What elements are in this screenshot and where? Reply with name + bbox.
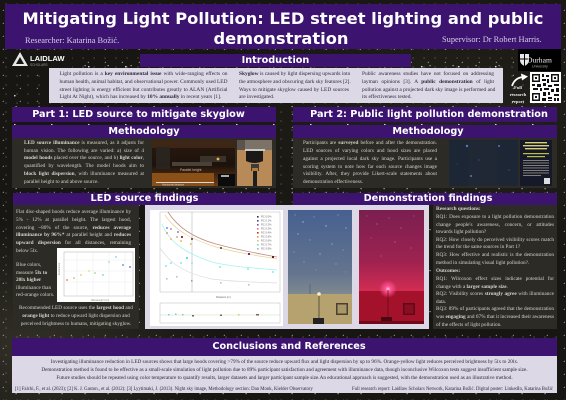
text: research questions: the trend for the same sources in Part 1? <box>436 244 520 250</box>
panel: charts and photos <box>145 205 429 329</box>
photo: red lamp under projected sky <box>359 210 424 324</box>
text: conclusions: Future studies should be repeated using color temperature to quantify results, larger datasets and larger participant sample size.An educational approach is suggested, with the demonstration used as an illustrative method. <box>56 375 513 381</box>
photo: measurement setup in dark room: Parallel height <box>180 168 202 172</box>
text: hood results: below 5lx. <box>16 248 38 254</box>
text: recommendation: orange light to reduce upward light dispersion and <box>22 313 130 319</box>
text: conclusions: Demonstration method is found to be effective as a small-scale simulation of light pollution due to 89% participant satisfaction and agreement with illuminance data, though inconclusive Wilcoxon tests suggest insufficient sample size. <box>41 367 528 373</box>
text: skyglow: are investigated. <box>239 94 274 100</box>
text: hood results: covering ~80% of the source, reduces average <box>16 224 131 230</box>
label: full research report: Full <box>514 85 522 90</box>
text: recommendation: perceived brightness to humans, mitigating skyglow. <box>21 320 131 326</box>
label: full research report: research <box>510 92 526 97</box>
chart: illuminance by wavelength: Illuminance <box>58 262 61 275</box>
chart: illuminance by wavelength <box>57 248 135 302</box>
logo: Durham University: University <box>532 64 548 68</box>
text: skyglow: the atmosphere and obscuring dark sky features [2]. <box>239 79 351 85</box>
text: methodology description: block light dispersion, with illuminance measured at <box>24 171 144 177</box>
panel: Part 1 methodology <box>12 138 276 188</box>
title <box>23 8 543 48</box>
title: Mitigating Light Pollution: LED street lighting and public <box>23 8 543 28</box>
supervisor name: Supervisor: Dr Robert Harris. <box>442 35 542 44</box>
text: research questions: towards light pollution? <box>436 229 486 235</box>
text: methodology description: parallel height to and above source. <box>24 179 99 185</box>
chart: illuminance against distance: RC 0.4% <box>261 231 272 235</box>
logo: Durham University: Durham <box>527 56 552 64</box>
text: research questions: RQ2: How closely do perceived visibility scores match <box>436 236 554 242</box>
text: skyglow: Skyglow is caused by light dispersing upwards into <box>239 71 350 77</box>
text: demonstration method: Participants are surveyed before and after the demonstration. <box>303 140 437 146</box>
text: light pollution context: Light At Night), which has increased by 10% annually in recent years [1]. <box>60 94 221 100</box>
text: public awareness: pollution against a projected dark sky image is performed and <box>362 86 495 92</box>
text: methodology description: human vision. The following are varied: a) size of 4 <box>24 148 144 154</box>
text: research questions: Research questions: <box>436 206 481 212</box>
text: recommendation: Recommended LED source uses the largest hood and <box>19 305 133 311</box>
heading: Conclusions and References <box>12 338 557 356</box>
text: public awareness: its effectiveness tested. <box>362 94 412 100</box>
text: public awareness: layman opinions [3]. A public demonstration of light <box>362 79 494 85</box>
text: hood results: Flat disc-shaped hoods reduce average illuminance by <box>16 209 131 215</box>
heading: Conclusions and References: Conclusions and References <box>212 341 366 352</box>
heading: Part 2 <box>293 107 557 122</box>
heading: Part 1: Part 1: LED source to mitigate skyglow <box>32 109 245 120</box>
poster: survey sheet <box>520 140 552 186</box>
photo: white/yellow lamp under projected sky <box>288 210 352 324</box>
text: blue colors: illuminance than <box>16 285 51 291</box>
chart: illuminance against distance: RC 0.6% <box>261 239 272 243</box>
panel: introduction text <box>49 68 503 102</box>
heading: Introduction: Introduction <box>242 55 309 66</box>
text: outcomes: was engaging and 67% that it increased their awareness <box>436 314 554 320</box>
text: methodology description: model hoods placed over the source, and b) light color, <box>24 155 144 161</box>
text: hood results: 5% - 12% at parallel height. The largest hood, <box>16 217 131 223</box>
icon: arrow to QR code <box>511 74 528 86</box>
chart: illuminance by wavelength: Wavelength (nm) <box>91 299 109 302</box>
panel: LED source findings text <box>13 205 139 329</box>
text: conclusions: Investigating illuminance reduction in LED sources shows that large hoods covering >79% of the source reduce upward flux and light dispersion by up to 96%. Orange-yellow light reduces perceived brightness by 5lx to 20lx. <box>51 359 518 365</box>
QR code <box>530 72 561 103</box>
text: research questions: RQ3: How effective and realistic is the demonstration <box>436 252 554 258</box>
chart: illuminance against distance: RC 0.7% <box>261 243 272 247</box>
panel: conclusions text <box>12 356 557 393</box>
text: methodology description: LED source illuminance is measured, as it adjusts for <box>24 140 144 146</box>
heading: Demonstration findings: Demonstration findings <box>364 193 492 204</box>
text: outcomes: RQ3: 89% of participants agreed that the demonstration <box>436 306 554 312</box>
text: demonstration method <box>303 140 437 185</box>
text: demonstration method: LED sources of varying colors and hood sizes are placed <box>303 148 437 154</box>
researcher name: Researcher: Katarina Božić. <box>25 36 119 45</box>
text: light pollution context: human health, animal habitat, and observational power. Commonly used LED <box>60 79 228 85</box>
logo: Laidlaw Scholars <box>12 50 72 68</box>
text: methodology description <box>24 140 144 185</box>
text: skyglow: Ways to mitigate skyglow caused by LED sources <box>239 86 349 92</box>
text: research questions <box>436 206 554 266</box>
text: research questions: change people's awareness, concern, or attitudes <box>436 222 554 228</box>
text: demonstration method: against a projected local dark sky image. Participants use a <box>303 156 437 162</box>
heading: Part 1 methodology <box>12 125 276 138</box>
text: light pollution context <box>60 71 228 100</box>
text: research questions: method in simulating visual light pollution?. <box>436 260 529 266</box>
text: public awareness: Public awareness studies have not focused on addressing <box>362 71 494 77</box>
text: hood results: upward dispersion for all distances, remaining <box>16 240 131 246</box>
text: outcomes: RQ1: Wilcoxon effect sizes indicate potential for <box>436 276 554 282</box>
text: light pollution context: Light pollution is a key environmental issue with wide-ranging effects on <box>60 71 228 77</box>
text: blue colors <box>16 262 54 298</box>
text: outcomes: Outcomes: <box>436 268 460 274</box>
heading: Demonstration findings <box>293 193 557 205</box>
text: blue colors: Blue colors, <box>16 262 41 268</box>
heading: Introduction <box>140 54 411 67</box>
text: skyglow <box>239 71 351 100</box>
heading: LED source findings <box>13 193 276 205</box>
heading: Part 1 <box>12 107 276 122</box>
chart: illuminance against distance: RC 0.8% <box>261 247 272 251</box>
title banner <box>5 4 561 49</box>
text: conclusions <box>41 359 528 381</box>
text: recommendation <box>19 305 133 326</box>
photo: projected dark sky <box>449 140 518 186</box>
text: hood results <box>16 209 131 254</box>
text: demonstration method: visibility. After, they provide Likert-scale statements about <box>303 171 437 177</box>
text: light pollution context: street lighting is energy efficient but contributes greatly to ALAN (Artificial <box>60 86 228 92</box>
heading: LED source findings: LED source findings <box>91 193 198 204</box>
panel: Part 2 methodology <box>293 138 557 188</box>
logo: Laidlaw Scholars: SCHOLARS <box>30 63 48 67</box>
text: references: [1] Falchi, F., et al. (2023); [2] K. J. Gaston., et al. (2012); [3] Lyytimaki, J. (2013). Night sky image, Methodology section: Dan Monk, Kielder Observatory <box>15 387 313 392</box>
text: credits: Full research report: Laidlaw Scholars Network, Katarina Božić. Digital poster: LinkedIn, Katarina Božić <box>352 387 553 392</box>
heading: Part 2 methodology: Methodology <box>392 126 464 137</box>
chart: illuminance against distance: RC 0.5% <box>261 235 272 239</box>
heading: Part 1 methodology: Methodology <box>108 126 180 137</box>
text: blue colors: measure 5lx to <box>16 270 47 276</box>
label: full research report <box>510 85 526 104</box>
text: methodology description: quantified by wavelength. The model hoods aim to <box>24 163 144 169</box>
text: outcomes: of the effects of light pollution. <box>436 322 502 328</box>
text: public awareness <box>362 71 496 100</box>
title: demonstration <box>213 28 349 48</box>
text: hood results: illuminance by 96%* at parallel height and reduces <box>16 232 131 238</box>
text: blue colors: red-orange colors. <box>16 292 54 298</box>
chart: illuminance against distance: RC 0.1% <box>261 219 272 223</box>
text: blue colors: 20lx higher <box>16 277 41 283</box>
text: demonstration method: demonstration effectiveness. <box>303 179 363 185</box>
text: outcomes <box>436 268 554 328</box>
logo: Durham University <box>518 49 561 71</box>
text: outcomes: RQ2: Visibility scores strongly agree with illuminance <box>436 291 554 297</box>
heading: Part 2: Part 2: Public light pollution demonstration <box>310 109 548 120</box>
text: demonstration method: scoring system to note how far each source changes image <box>303 164 437 170</box>
heading: Part 2 methodology <box>293 125 557 138</box>
text: research questions: RQ1: Does exposure to a light pollution demonstration <box>436 214 554 220</box>
photo: measurement setup in dark room <box>152 140 235 186</box>
chart: illuminance against distance: RC 0.0% <box>261 215 272 219</box>
panel: research questions and outcomes <box>433 205 557 329</box>
chart: illuminance against distance: RC 0.3% <box>261 227 272 231</box>
label: full research report: report <box>512 99 524 104</box>
text: outcomes: change with a larger sample size. <box>436 284 508 290</box>
photo: LED source with hood <box>237 140 272 186</box>
chart: illuminance against distance <box>150 210 283 326</box>
logo: Laidlaw Scholars: LAIDLAW <box>30 54 65 63</box>
text: outcomes: data. <box>436 299 446 305</box>
chart: illuminance against distance: RC 0.2% <box>261 223 272 227</box>
chart: illuminance against distance: Distance (m) <box>216 295 231 299</box>
